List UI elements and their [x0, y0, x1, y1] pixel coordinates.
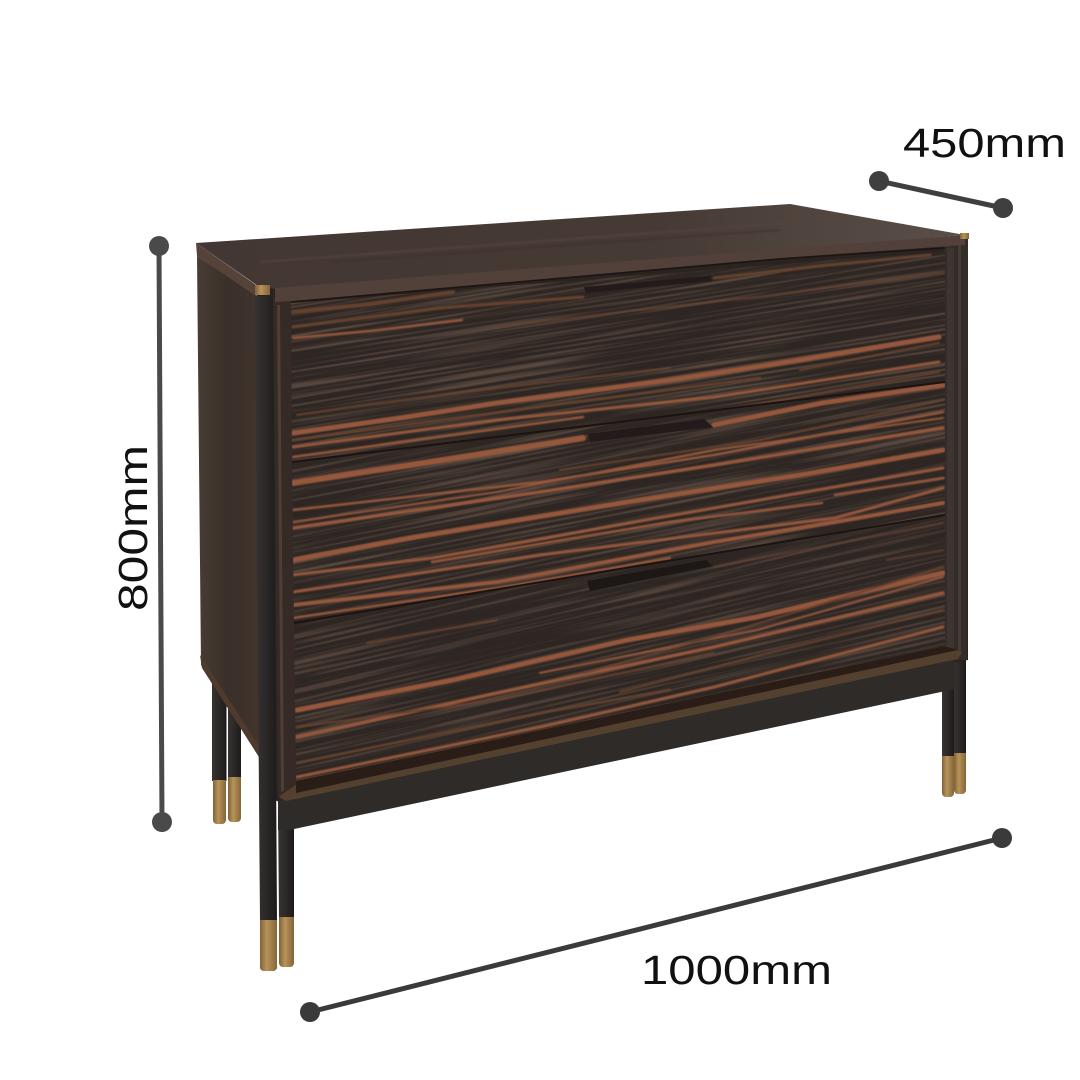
infographic: chest of drawers dimensions: [118, 128, 1063, 1022]
left front leg and post: [255, 296, 294, 971]
drawer handles: [584, 276, 713, 591]
dimension: width line: [300, 828, 1012, 1022]
right side upright: [944, 236, 968, 660]
label: height: 800mm: [110, 445, 156, 611]
lower black rail: [278, 660, 955, 830]
back right legs: [942, 655, 966, 797]
back left legs: [212, 670, 241, 824]
drawer 3: [294, 518, 945, 780]
front left trim: [273, 298, 296, 797]
dimension: depth line: [869, 171, 1013, 218]
handle: top drawer: [584, 276, 712, 293]
label: width: 1000mm: [641, 947, 832, 993]
label: depth: 450mm: [903, 120, 1066, 166]
drawer gap lines: [292, 382, 945, 623]
drawer 2: [292, 383, 945, 620]
handle: middle drawer: [588, 419, 713, 442]
top front moulding: [255, 233, 969, 302]
dimension: height line: [149, 236, 172, 832]
lower wood lip: [279, 645, 962, 801]
cabinet body backing: [256, 235, 968, 802]
handle: bottom drawer: [587, 560, 713, 591]
chest top surface: [196, 204, 965, 296]
chest side panel: [197, 256, 259, 757]
drawer 1: [291, 252, 945, 461]
